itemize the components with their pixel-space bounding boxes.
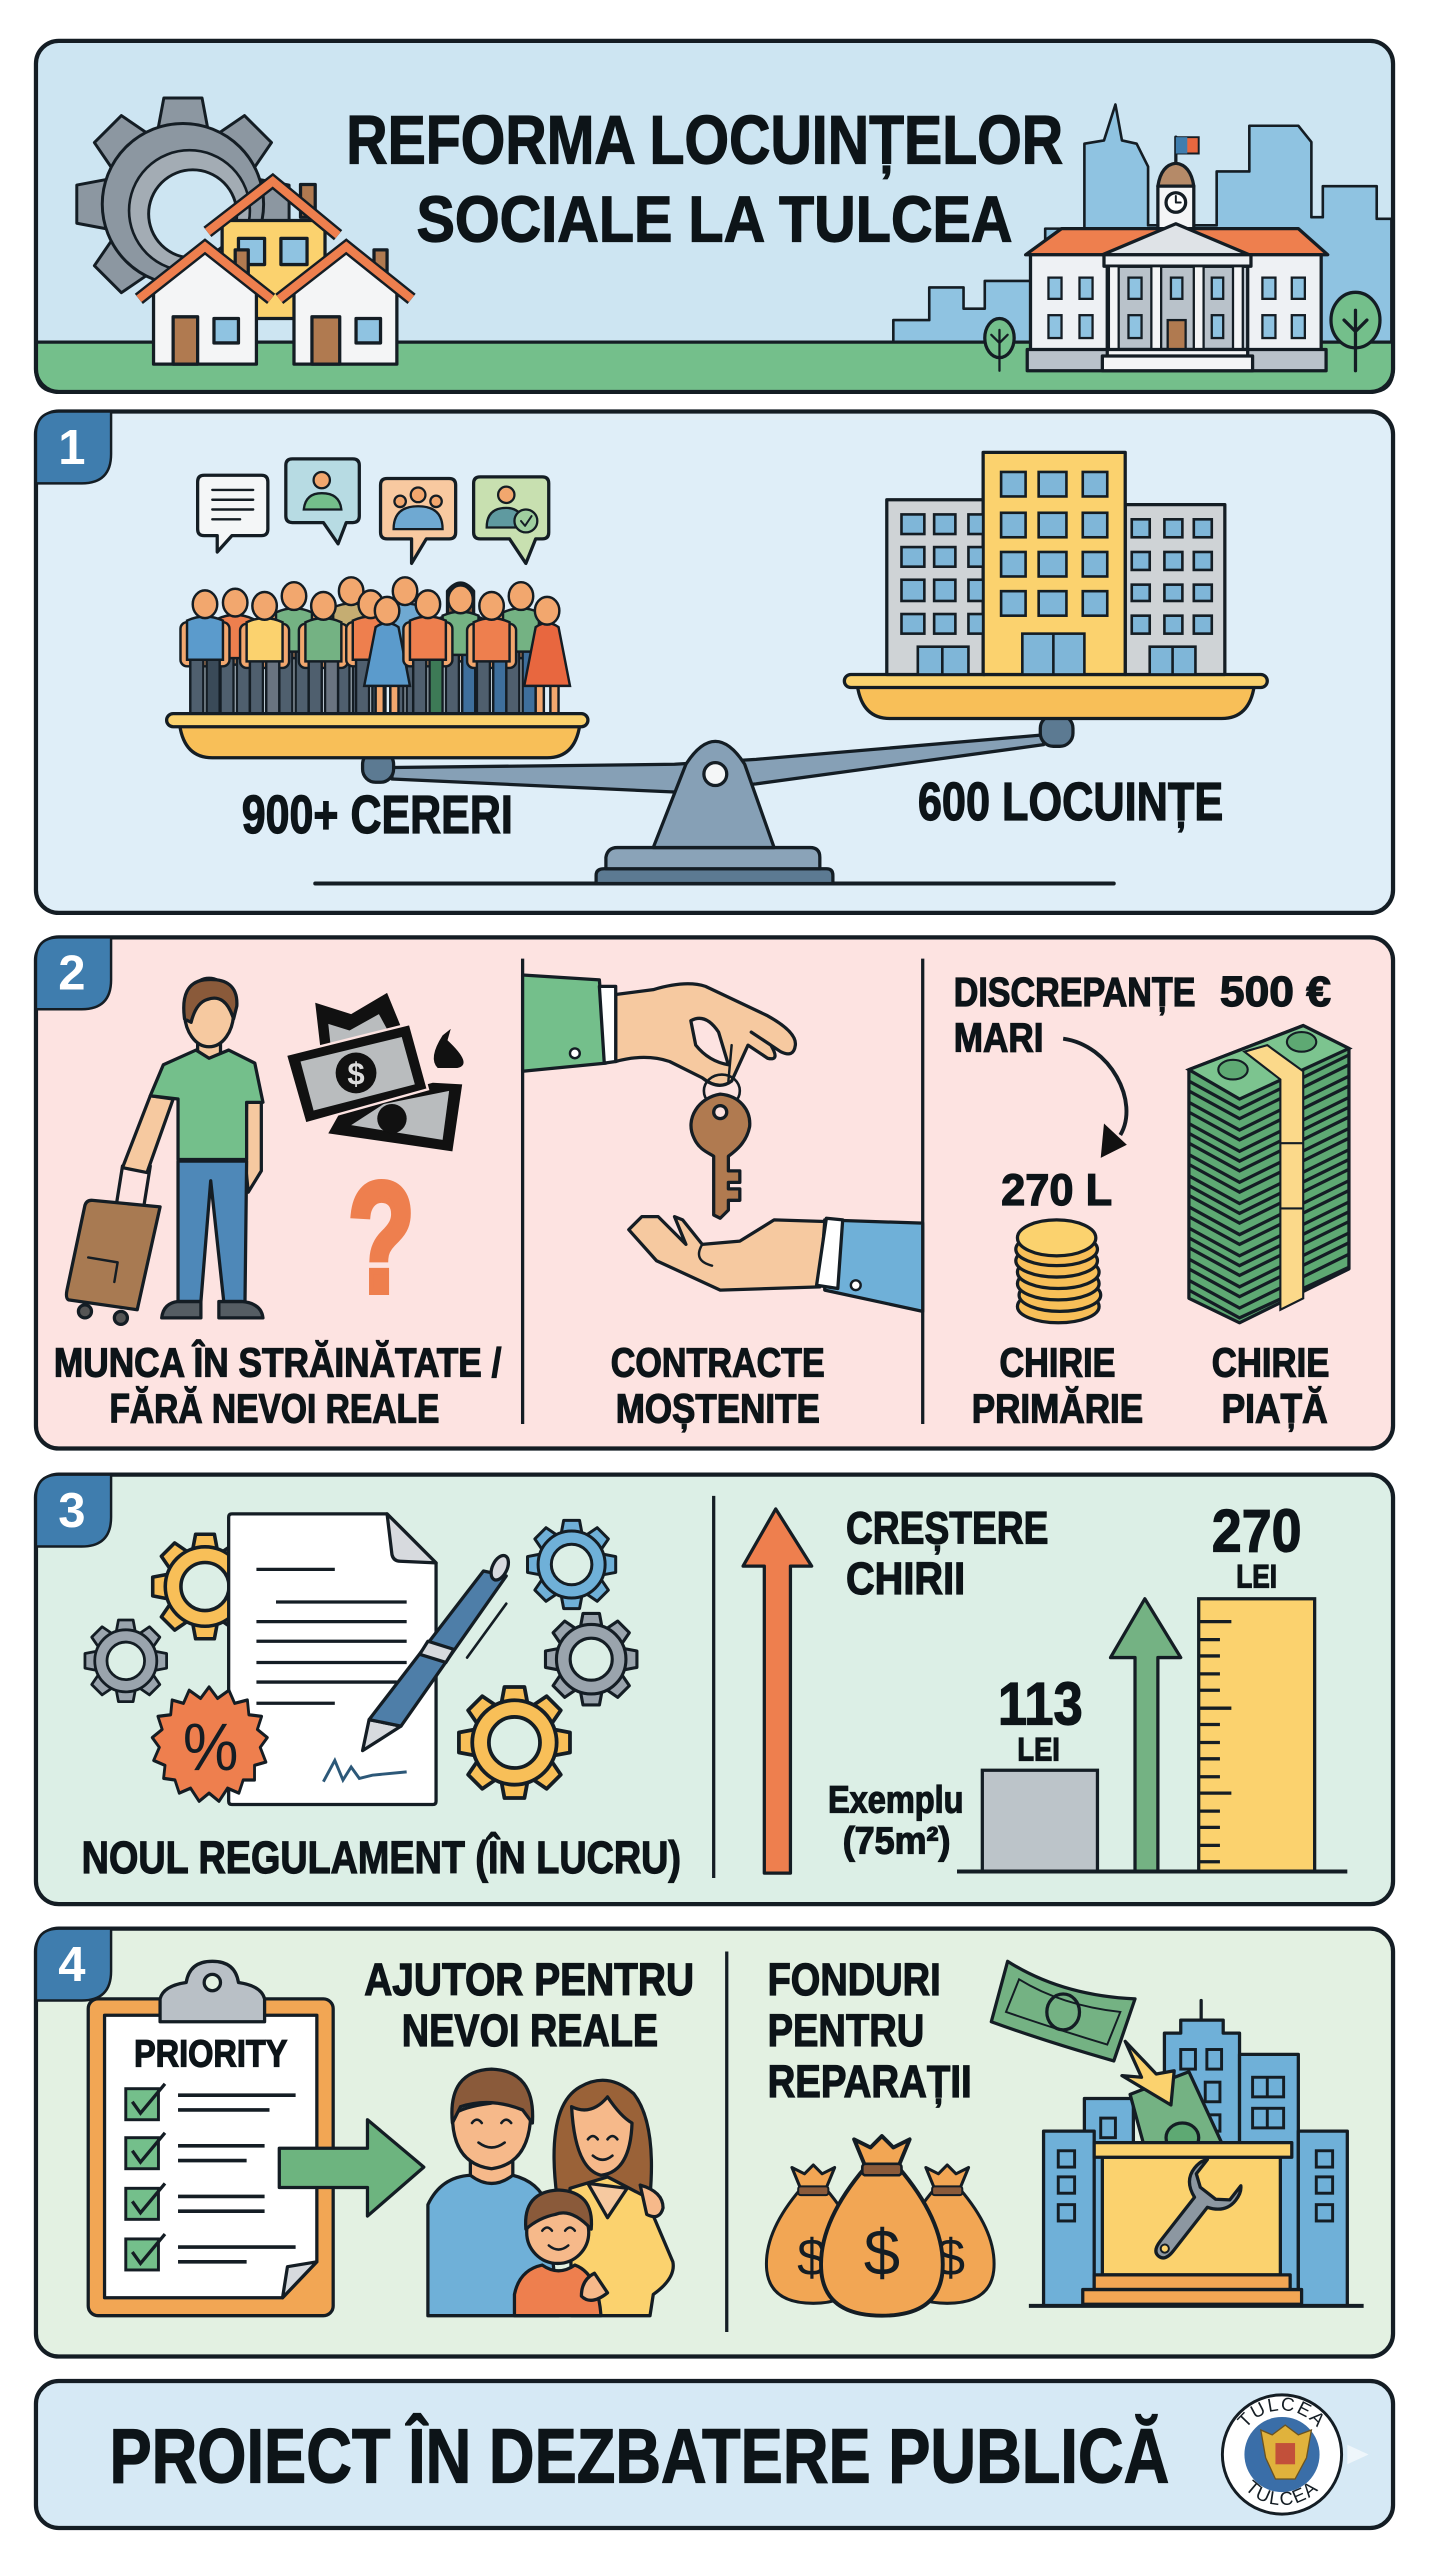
label: ajutor: NEVOI REALE	[402, 2005, 658, 2056]
icon: right tree	[1331, 292, 1380, 371]
icon: orange badge: %	[183, 1710, 238, 1785]
label: locuințe: 600 LOCUINȚE	[918, 772, 1223, 832]
footer panel	[34, 2378, 1396, 2530]
icon: banknotes	[286, 993, 464, 1151]
icon: stack of cash	[1189, 1026, 1349, 1323]
seal: Tulcea	[1220, 2393, 1344, 2516]
icon: document	[229, 1514, 436, 1805]
left pan	[180, 725, 580, 758]
label: ajutor	[364, 1954, 694, 2056]
label: discrepanțe: MARI	[954, 1015, 1044, 1061]
badge 1	[36, 412, 111, 483]
bar: 270 lei	[1199, 1599, 1315, 1871]
icon: money bags: $	[864, 2216, 900, 2289]
bar: 113 lei	[982, 1770, 1097, 1871]
badge 4	[36, 1929, 111, 2001]
label: fonduri: REPARAȚII	[768, 2056, 972, 2108]
label: chirie primărie: CHIRIE	[999, 1340, 1115, 1386]
icon: coins	[1016, 1220, 1101, 1323]
badge 2	[36, 937, 111, 1009]
badge 1: 1	[58, 421, 86, 475]
icon: money bags: $	[797, 2229, 826, 2287]
badge 3	[36, 1475, 111, 1547]
panel 2: probleme	[36, 937, 1393, 1449]
ruler ticks	[1199, 1622, 1231, 1862]
arrow: green up	[1111, 1599, 1181, 1871]
panel 1: cereri vs locuințe	[36, 412, 1393, 913]
icon: balance scale	[167, 674, 1267, 883]
icon: money bags	[766, 2136, 994, 2316]
arrow: green right	[279, 2120, 424, 2216]
value: 113 lei	[998, 1670, 1083, 1767]
title	[346, 101, 1063, 256]
badge 2: 2	[58, 947, 86, 1001]
label: exemplu: (75m²)	[843, 1820, 950, 1862]
icon: man with suitcase	[66, 978, 263, 1324]
label: contracte: MOȘTENITE	[616, 1385, 820, 1431]
icon: gears	[85, 1520, 637, 1798]
label: ajutor: AJUTOR PENTRU	[364, 1954, 694, 2005]
badge 3: 3	[58, 1484, 86, 1538]
icon: left house	[139, 247, 271, 364]
icon: money bags: $	[936, 2229, 965, 2287]
icon: orange badge	[152, 1687, 267, 1801]
value: 270 lei	[1212, 1496, 1302, 1594]
label: chirie piață: CHIRIE	[1212, 1340, 1329, 1386]
arrow: orange up	[743, 1509, 812, 1873]
label: creștere chirii: CREȘTERE	[846, 1502, 1048, 1554]
title: REFORMA LOCUINȚELOR	[346, 101, 1063, 179]
father	[428, 2069, 559, 2316]
title: SOCIALE LA TULCEA	[416, 183, 1013, 256]
label: contracte	[611, 1340, 825, 1431]
panel 4: soluții	[36, 1929, 1393, 2357]
bar chart: 113 to 270 lei	[957, 1599, 1347, 1871]
label: chirie primărie: PRIMĂRIE	[972, 1385, 1143, 1431]
crowd of people	[180, 577, 570, 741]
seal: Tulcea: TULCEA	[1236, 2398, 1323, 2428]
label: creștere chirii: CHIRII	[846, 1553, 965, 1604]
label: discrepanțe	[954, 969, 1195, 1061]
label: exemplu	[828, 1779, 964, 1862]
icon: priority clipboard: PRIORITY	[134, 2033, 287, 2075]
icon: family	[428, 2069, 673, 2316]
header panel	[36, 41, 1393, 392]
child	[514, 2190, 608, 2316]
label: contracte: CONTRACTE	[611, 1340, 825, 1386]
label: munca: MUNCA ÎN STRĂINĂTATE /	[54, 1340, 501, 1386]
panel 3: noul regulament	[36, 1475, 1393, 1904]
label: munca	[54, 1340, 501, 1431]
footer text: PROIECT ÎN DEZBATERE PUBLICĂ	[109, 2413, 1169, 2499]
label: 270 L: 270 L	[1001, 1166, 1112, 1215]
value: 270 lei: LEI	[1236, 1557, 1277, 1594]
axis	[957, 1870, 1347, 1873]
label: exemplu: Exemplu	[828, 1779, 964, 1821]
label: chirie piață: PIAȚĂ	[1222, 1385, 1328, 1431]
icon: gear	[77, 98, 289, 310]
label: cereri: 900+ CERERI	[242, 785, 513, 845]
label: fonduri: FONDURI	[768, 1954, 941, 2005]
icon: question mark: ?	[348, 1151, 415, 1326]
label: fonduri: PENTRU	[768, 2005, 924, 2056]
mother	[554, 2080, 673, 2316]
faint arrow	[1347, 2445, 1369, 2464]
arrow: curved	[1063, 1039, 1127, 1158]
icon: pen	[363, 1553, 512, 1751]
icon: left tree	[985, 318, 1014, 371]
label: fonduri	[768, 1954, 972, 2108]
right pan	[857, 686, 1254, 719]
label: chirie primărie	[972, 1340, 1143, 1431]
icon: town hall	[1026, 137, 1328, 371]
value: 113 lei: LEI	[1017, 1730, 1060, 1767]
icon: apartment buildings	[887, 452, 1225, 674]
value: 113 lei: 113	[998, 1670, 1083, 1738]
label: munca: FĂRĂ NEVOI REALE	[109, 1385, 439, 1431]
icon: key handover	[523, 975, 923, 1311]
badge 4: 4	[58, 1938, 86, 1992]
icon: banknotes: $	[347, 1056, 365, 1091]
label: chirie piață	[1212, 1340, 1329, 1431]
label: creștere chirii	[846, 1502, 1048, 1604]
value: 270 lei: 270	[1212, 1496, 1302, 1564]
icon: repair fund buildings	[991, 1961, 1364, 2306]
label: 500 euro: 500 €	[1220, 968, 1331, 1015]
seal: Tulcea: TULCEA	[1248, 2479, 1318, 2506]
icon: right house	[279, 247, 412, 364]
icon: priority clipboard	[88, 1961, 333, 2316]
icon: yellow house	[207, 181, 338, 318]
label: discrepanțe: DISCREPANȚE	[954, 969, 1195, 1015]
ground	[36, 342, 1393, 392]
icon: skyline	[893, 105, 1391, 343]
speech bubbles	[198, 459, 549, 563]
label: noul regulament: NOUL REGULAMENT (ÎN LUCRU)	[82, 1831, 681, 1883]
